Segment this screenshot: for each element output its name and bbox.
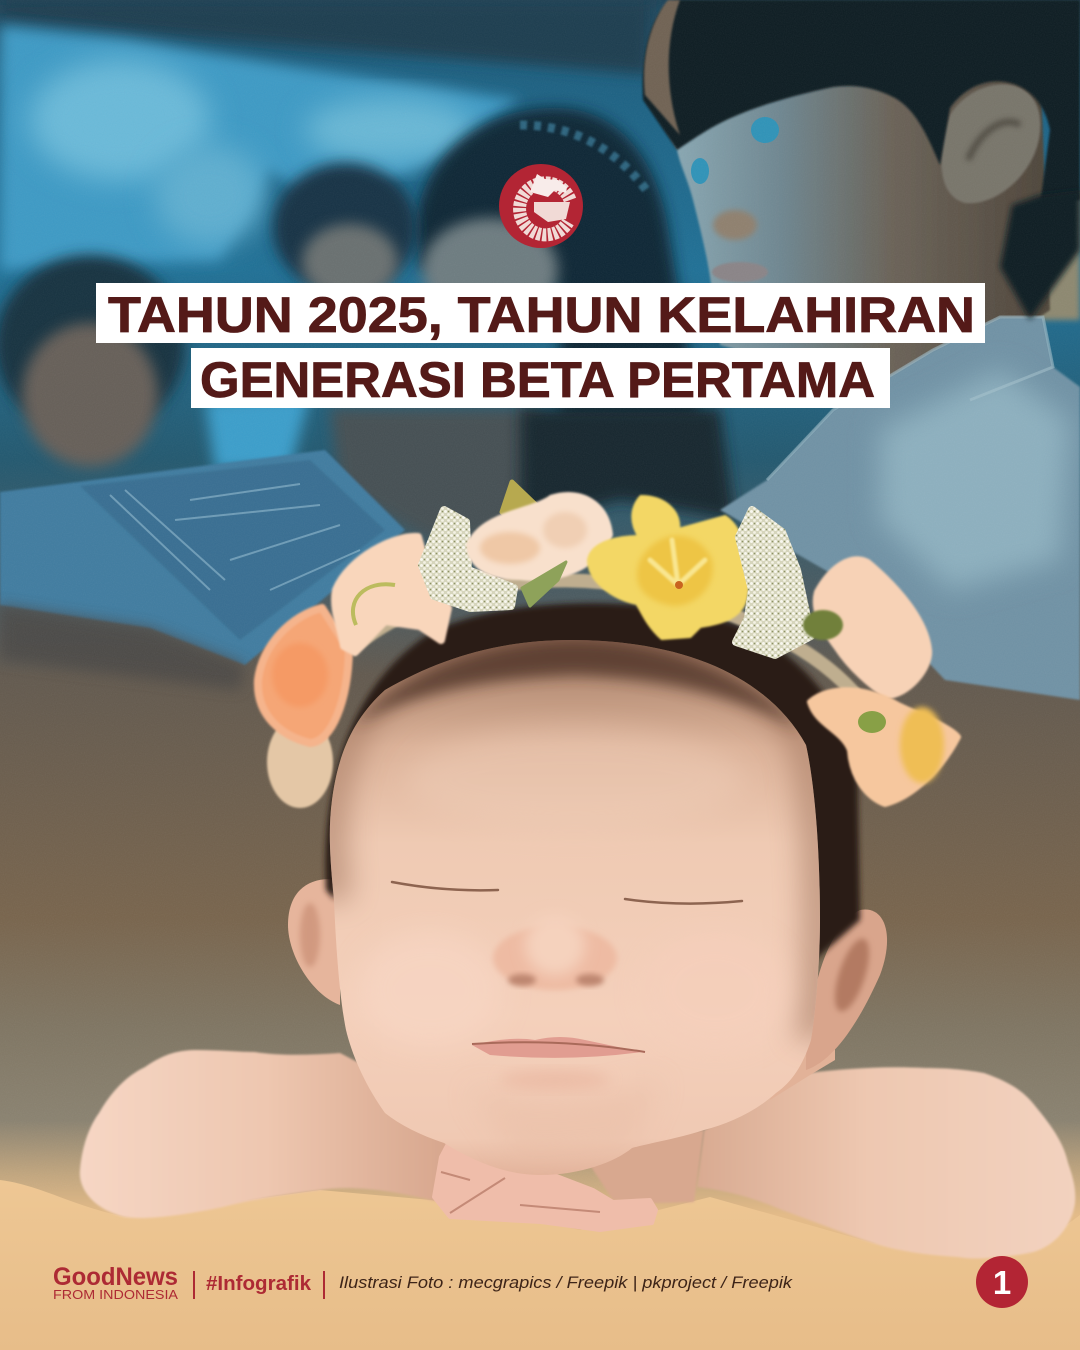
white cluster left <box>422 510 514 608</box>
cheeks <box>388 949 472 988</box>
head <box>320 630 830 1180</box>
logo badge <box>499 164 583 248</box>
left arm <box>80 1050 470 1218</box>
cream peony <box>466 492 613 581</box>
crown base <box>350 580 860 700</box>
footer brand: GoodNews from Indonesia <box>53 1263 178 1302</box>
yellow rose <box>589 497 747 638</box>
left peach flower <box>335 537 448 652</box>
footer brand: GoodNews from Indonesia: GoodNews <box>53 1263 178 1291</box>
background scene: blue screen and children <box>0 0 735 540</box>
title line 1: TAHUN 2025, TAHUN KELAHIRAN <box>108 287 975 343</box>
girl in the middle <box>415 108 700 420</box>
green bud <box>502 482 536 526</box>
lower left cream flower <box>267 716 333 808</box>
flower crown <box>258 482 958 808</box>
neck behind right cheek <box>770 1030 835 1100</box>
boy on the right <box>643 0 1080 700</box>
hair <box>643 0 1080 205</box>
page number badge: 1 <box>993 1264 1011 1301</box>
lower right flower <box>810 690 958 804</box>
orange flower <box>258 608 349 743</box>
baby body <box>80 603 1075 1258</box>
ear <box>941 84 1040 203</box>
soft rim shading <box>330 640 820 1040</box>
forehead glow <box>422 729 728 796</box>
right arm <box>697 1067 1075 1258</box>
hairline <box>355 640 800 730</box>
shirt <box>720 317 1080 700</box>
footer divider and hashtag <box>193 1271 325 1299</box>
child behind <box>273 163 417 293</box>
child on the left <box>0 255 185 435</box>
footer brand: GoodNews from Indonesia: FROM INDONESIA <box>53 1287 178 1302</box>
cushion under the baby <box>0 1180 1080 1350</box>
nose <box>493 926 617 990</box>
eyes, nose and mouth <box>751 117 779 143</box>
ears <box>288 879 340 1005</box>
footer divider and hashtag: #Infografik <box>206 1273 312 1295</box>
right peach flower <box>816 559 929 696</box>
hair <box>325 603 860 960</box>
mouth <box>472 1037 642 1058</box>
chin fold <box>470 1080 660 1160</box>
page number badge <box>976 1256 1028 1308</box>
beige background right of boy <box>1030 190 1080 320</box>
white cluster right <box>736 510 811 655</box>
tablet held by child <box>0 450 405 690</box>
footer photo credit: Ilustrasi Foto : mecgrapics / Freepik | pkproject / Freepik <box>339 1273 794 1292</box>
neck and face <box>650 60 1050 390</box>
eyes <box>392 882 498 890</box>
title line 2: GENERASI BETA PERTAMA <box>200 352 875 408</box>
baby hands under chin <box>434 1130 704 1230</box>
